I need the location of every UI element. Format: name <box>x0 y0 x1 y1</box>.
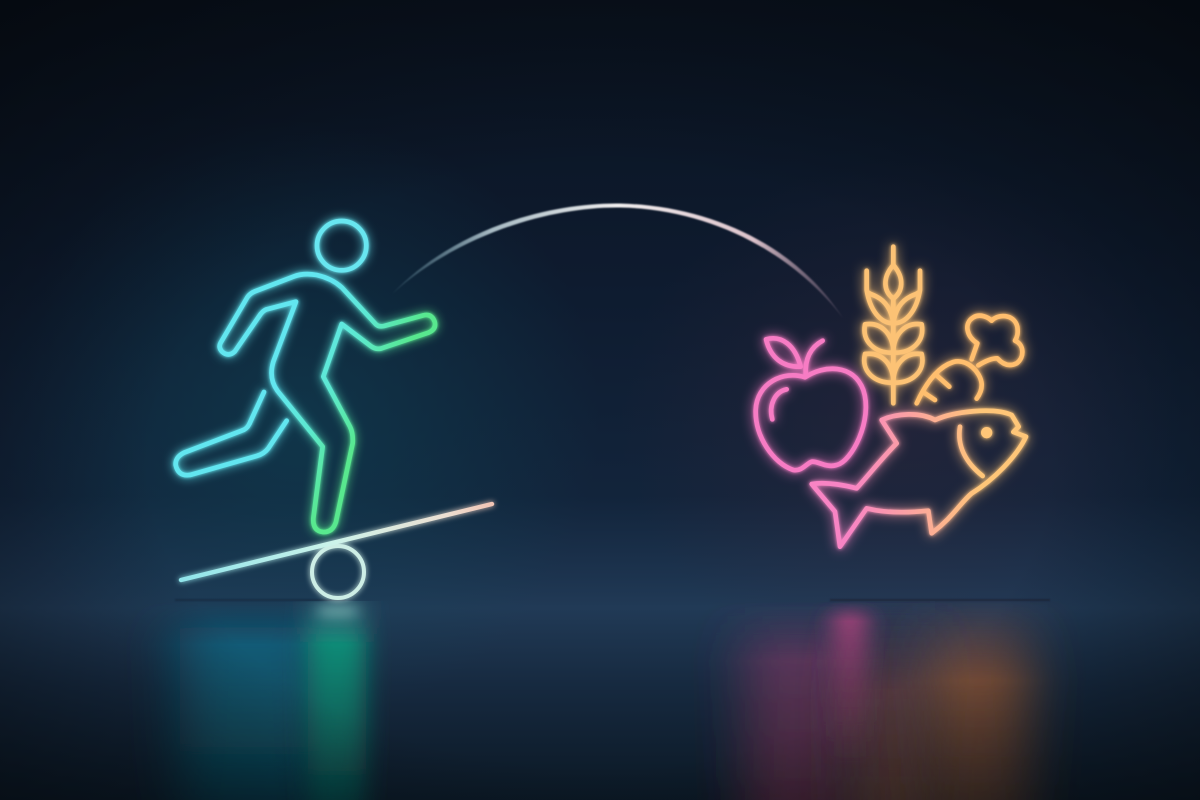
floor reflections <box>180 601 1030 800</box>
icon: wheat <box>864 247 922 403</box>
figure head <box>317 221 366 270</box>
icon: seesaw balance <box>181 504 492 598</box>
seesaw fulcrum <box>312 546 364 598</box>
figure torso, arms and front leg <box>220 274 435 532</box>
icon: carrot <box>917 316 1022 403</box>
icon: apple <box>756 338 866 470</box>
figure back leg <box>176 392 287 475</box>
seesaw beam <box>181 504 492 580</box>
fish eye <box>982 428 991 437</box>
icon: food group <box>756 247 1026 547</box>
icon: running figure <box>176 221 435 532</box>
arc arrow from figure to food <box>392 203 843 318</box>
icon: fish <box>812 411 1026 547</box>
horizon line shadows <box>175 599 1050 601</box>
